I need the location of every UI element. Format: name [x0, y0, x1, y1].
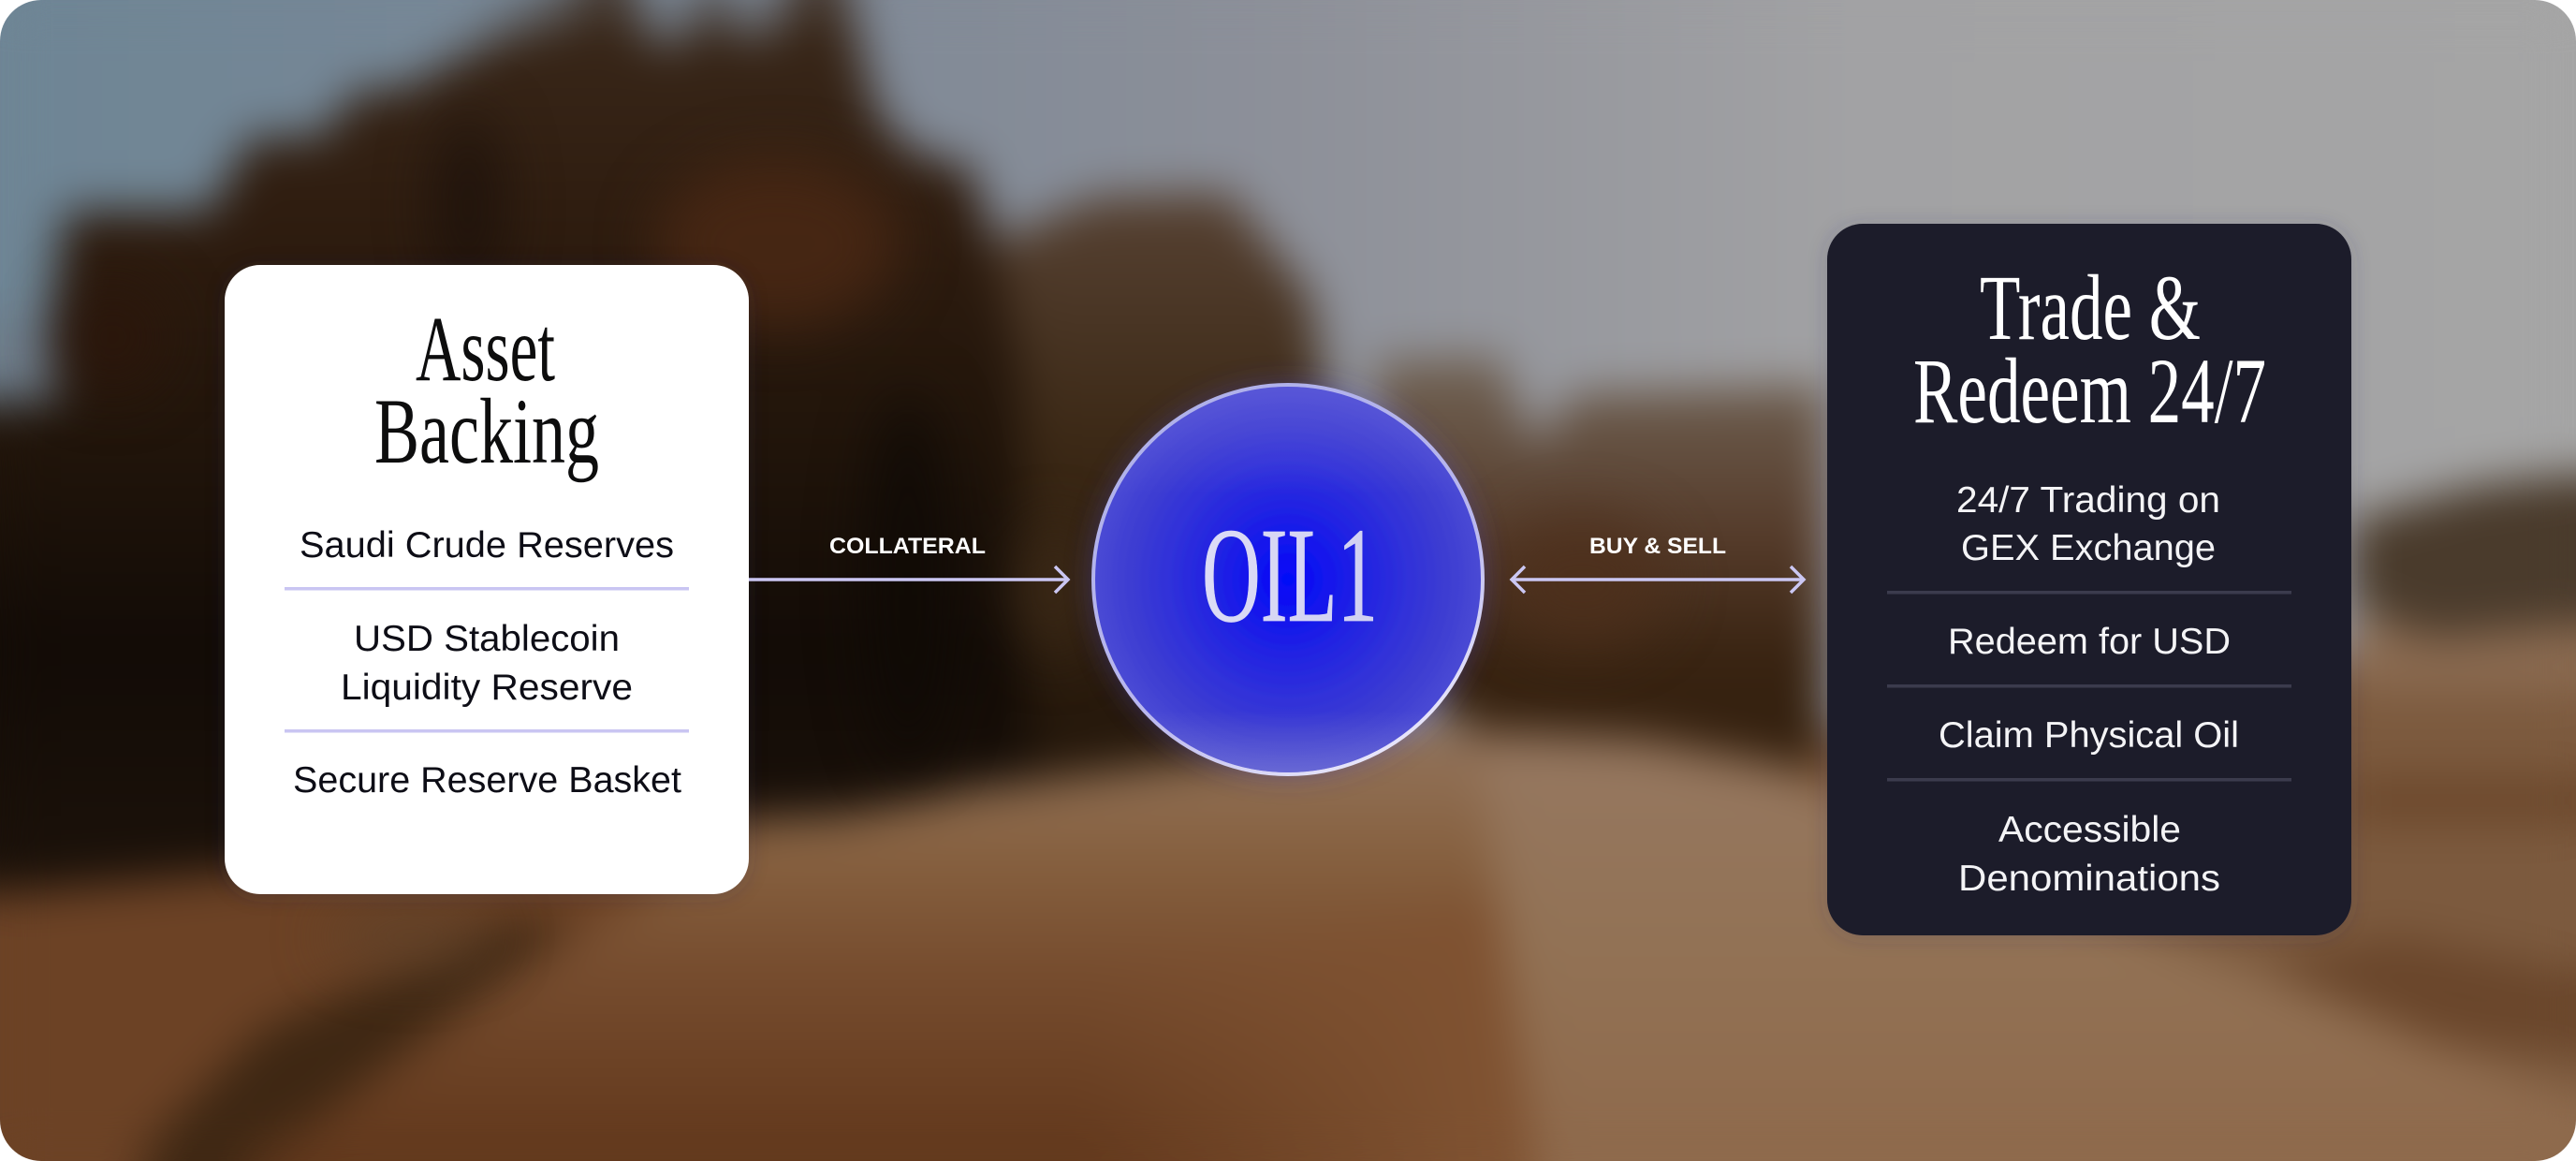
heading: Trade & Redeem 24/7: Redeem 24/7: [1913, 339, 2266, 443]
list: trade items: Claim Physical Oil: [1939, 715, 2239, 756]
label: buy and sell: BUY & SELL: [1589, 534, 1726, 559]
heading: Asset Backing: Asset: [416, 297, 555, 401]
central token: OIL1: [1093, 385, 1483, 774]
list: trade items: Accessible: [1998, 810, 2181, 850]
list: trade items: GEX Exchange: [1961, 528, 2216, 568]
heading: Trade & Redeem 24/7: [1913, 256, 2266, 443]
list: trade items: Redeem for USD: [1948, 622, 2231, 662]
central token: OIL1: OIL1: [1202, 501, 1378, 651]
arrow: buy and sell: [1512, 566, 1804, 593]
list: backing items: [285, 525, 689, 801]
list: backing items: Liquidity Reserve: [341, 668, 633, 708]
heading: Asset Backing: [374, 297, 599, 483]
arrow: collateral: [749, 566, 1068, 593]
list: trade items: 24/7 Trading on: [1956, 480, 2220, 521]
list: trade items: [1887, 480, 2291, 899]
label: collateral: COLLATERAL: [829, 534, 986, 559]
panel: trade and redeem: [1827, 224, 2351, 935]
panel: asset backing: [225, 265, 749, 894]
heading: Trade & Redeem 24/7: Trade &: [1980, 256, 2201, 360]
heading: Asset Backing: Backing: [374, 379, 599, 483]
list: backing items: USD Stablecoin: [354, 619, 620, 659]
list: trade items: Denominations: [1958, 859, 2220, 899]
list: backing items: Saudi Crude Reserves: [300, 525, 674, 566]
list: backing items: Secure Reserve Basket: [293, 760, 681, 801]
